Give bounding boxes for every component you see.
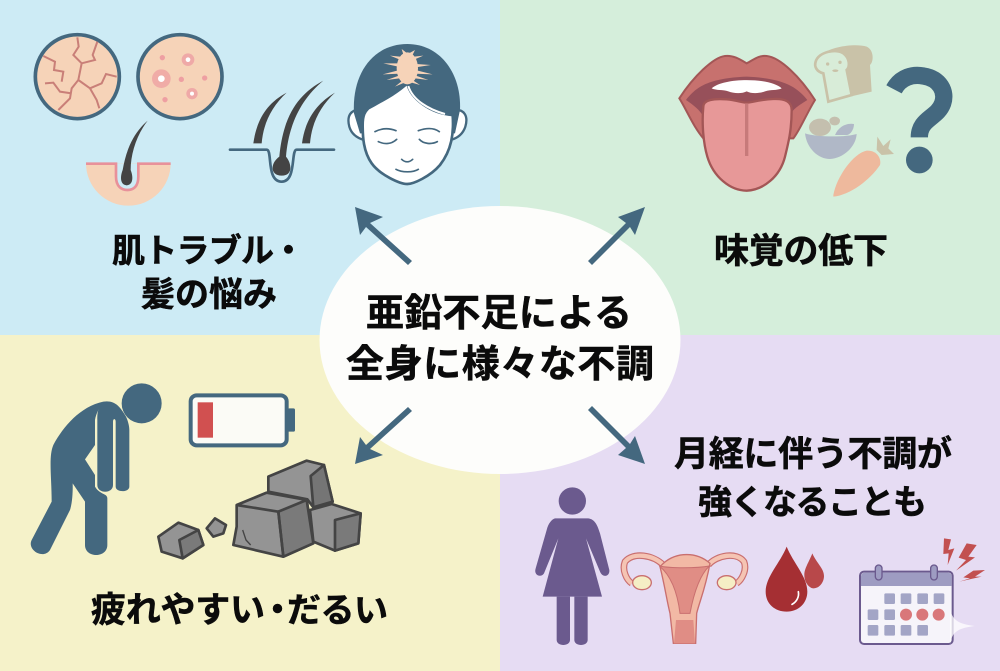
arrow: to taste panel bbox=[588, 207, 645, 265]
icon: blood drops bbox=[766, 547, 824, 612]
icon: question mark bbox=[894, 75, 944, 173]
icon: cracked dry skin bbox=[35, 35, 119, 119]
icon: mouth with tongue bbox=[679, 56, 815, 191]
icon: uterus bbox=[624, 555, 745, 643]
arrow: to skin panel bbox=[355, 207, 412, 265]
panel: menstrual troubles bbox=[500, 335, 1000, 671]
arrow: to menstrual panel bbox=[588, 406, 645, 464]
icon: bread bbox=[815, 45, 873, 102]
center title bbox=[346, 293, 654, 386]
icon: woman's face with thinning crown bbox=[348, 44, 466, 184]
icon: woman figure bbox=[535, 487, 609, 645]
icon: hair follicle in skin bbox=[86, 121, 171, 206]
heading: fatigue: だるい bbox=[287, 592, 388, 630]
icon: bowl of food bbox=[805, 117, 857, 159]
icon: low battery bbox=[191, 395, 295, 445]
icon: acne skin bbox=[138, 35, 222, 119]
icon: carrot bbox=[833, 137, 894, 197]
arrow: to fatigue panel bbox=[355, 407, 412, 464]
icon: exhausted person bbox=[31, 383, 162, 555]
center title: 全身に様々な不調 bbox=[346, 344, 654, 386]
heading: reduced taste: 味覚の低下 bbox=[714, 232, 888, 271]
heading: fatigue: 疲れやすい bbox=[91, 591, 265, 630]
heading: fatigue: ・ bbox=[260, 591, 295, 630]
heading: skin and hair troubles: 肌トラブル bbox=[112, 232, 274, 269]
panel: skin and hair troubles bbox=[0, 0, 500, 335]
heading: skin and hair troubles bbox=[112, 232, 305, 314]
center title: 亜鉛不足による bbox=[366, 293, 632, 335]
icon: sparkle mark bbox=[950, 608, 975, 644]
heading: menstrual troubles: 月経に伴う不調が bbox=[674, 435, 952, 474]
icon: heavy rocks bbox=[158, 461, 361, 558]
center oval bbox=[320, 206, 680, 474]
heading: skin and hair troubles: 髪の悩み bbox=[141, 276, 277, 314]
panel: fatigue and tiredness bbox=[0, 335, 500, 671]
heading: menstrual troubles: 強くなることも bbox=[698, 484, 927, 522]
heading: fatigue bbox=[91, 591, 388, 630]
icon: calendar with pain marks bbox=[860, 538, 985, 644]
heading: skin and hair troubles: ・ bbox=[272, 232, 305, 269]
heading: menstrual troubles bbox=[674, 435, 952, 522]
icon: thinning hair strands bbox=[230, 81, 335, 182]
panel: reduced sense of taste bbox=[500, 0, 1000, 335]
